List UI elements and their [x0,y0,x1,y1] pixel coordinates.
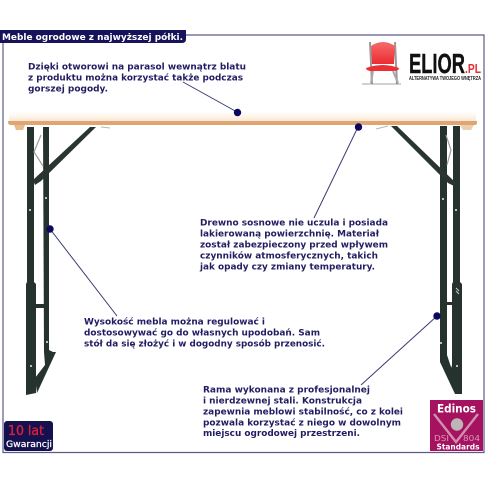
header banner: Meble ogrodowe z najwyższej półki. [2,32,183,43]
callout text: pozwala korzystać z niego w dowolnym [203,417,401,428]
callout text: dostosowywać go do własnych upodobań. Sam [84,327,320,338]
badge: 10 lat gwarancji: Gwarancji [6,440,52,450]
callout text [199,218,388,272]
callout text: lakierowaną powierzchnię. Materiał [200,229,380,239]
callout text: gorszej pogody. [28,84,108,94]
callout: steel frame [203,312,441,439]
callout: pine wood [199,123,388,272]
callout text: Rama wykonana z profesjonalnej [203,385,370,395]
callout text: Wysokość mebla można regulować i [84,316,265,327]
callout: height adjustment [46,225,325,349]
callout text: Drewno sosnowe nie uczula i posiada [200,218,388,228]
callout text: czynników atmosferycznych, takich [200,250,378,261]
callout text: zapewnia meblowi stabilność, co z kolei [203,406,403,417]
table illustration [8,111,477,395]
callout text: z produktu można korzystać także podczas [28,72,243,83]
logo: Elior [362,42,481,84]
callout text [28,62,246,94]
callout: parasol hole [28,62,246,116]
callout text: miejscu ogrodowej przestrzeni. [203,429,360,439]
callout text: został zabezpieczony przed wpływem [200,240,388,250]
callout text: Dzięki otworowi na parasol wewnątrz blatu [28,62,246,72]
badge: 10 lat gwarancji [4,421,53,451]
arrow line and dot [46,225,117,316]
badge: Edinos standards: DSI [434,434,449,443]
right legs [376,126,462,394]
callout text: stół da się złożyć i w dogodny sposób przenosić. [84,338,325,349]
badge: Edinos standards: Edinos [437,402,476,416]
callout text: i nierdzewnej stali. Konstrukcja [203,396,362,406]
arrow line and dot [314,123,362,218]
arrow line and dot [183,82,241,116]
badge: Edinos standards [430,400,483,452]
icon: V mark and circle [434,414,478,442]
logo: Elior: .PL [465,61,481,76]
icon: red chair [362,42,401,84]
callout text [203,385,403,439]
badge: Edinos standards: 804 [463,434,480,443]
arrow line and dot [361,312,441,385]
callout text [84,316,325,349]
left legs [26,127,110,395]
table top [8,111,477,130]
callout text: jak opady czy zmiany temperatury. [199,262,375,272]
badge: 10 lat gwarancji: 10 lat [8,424,44,439]
badge: Edinos standards: Standards [436,442,480,452]
